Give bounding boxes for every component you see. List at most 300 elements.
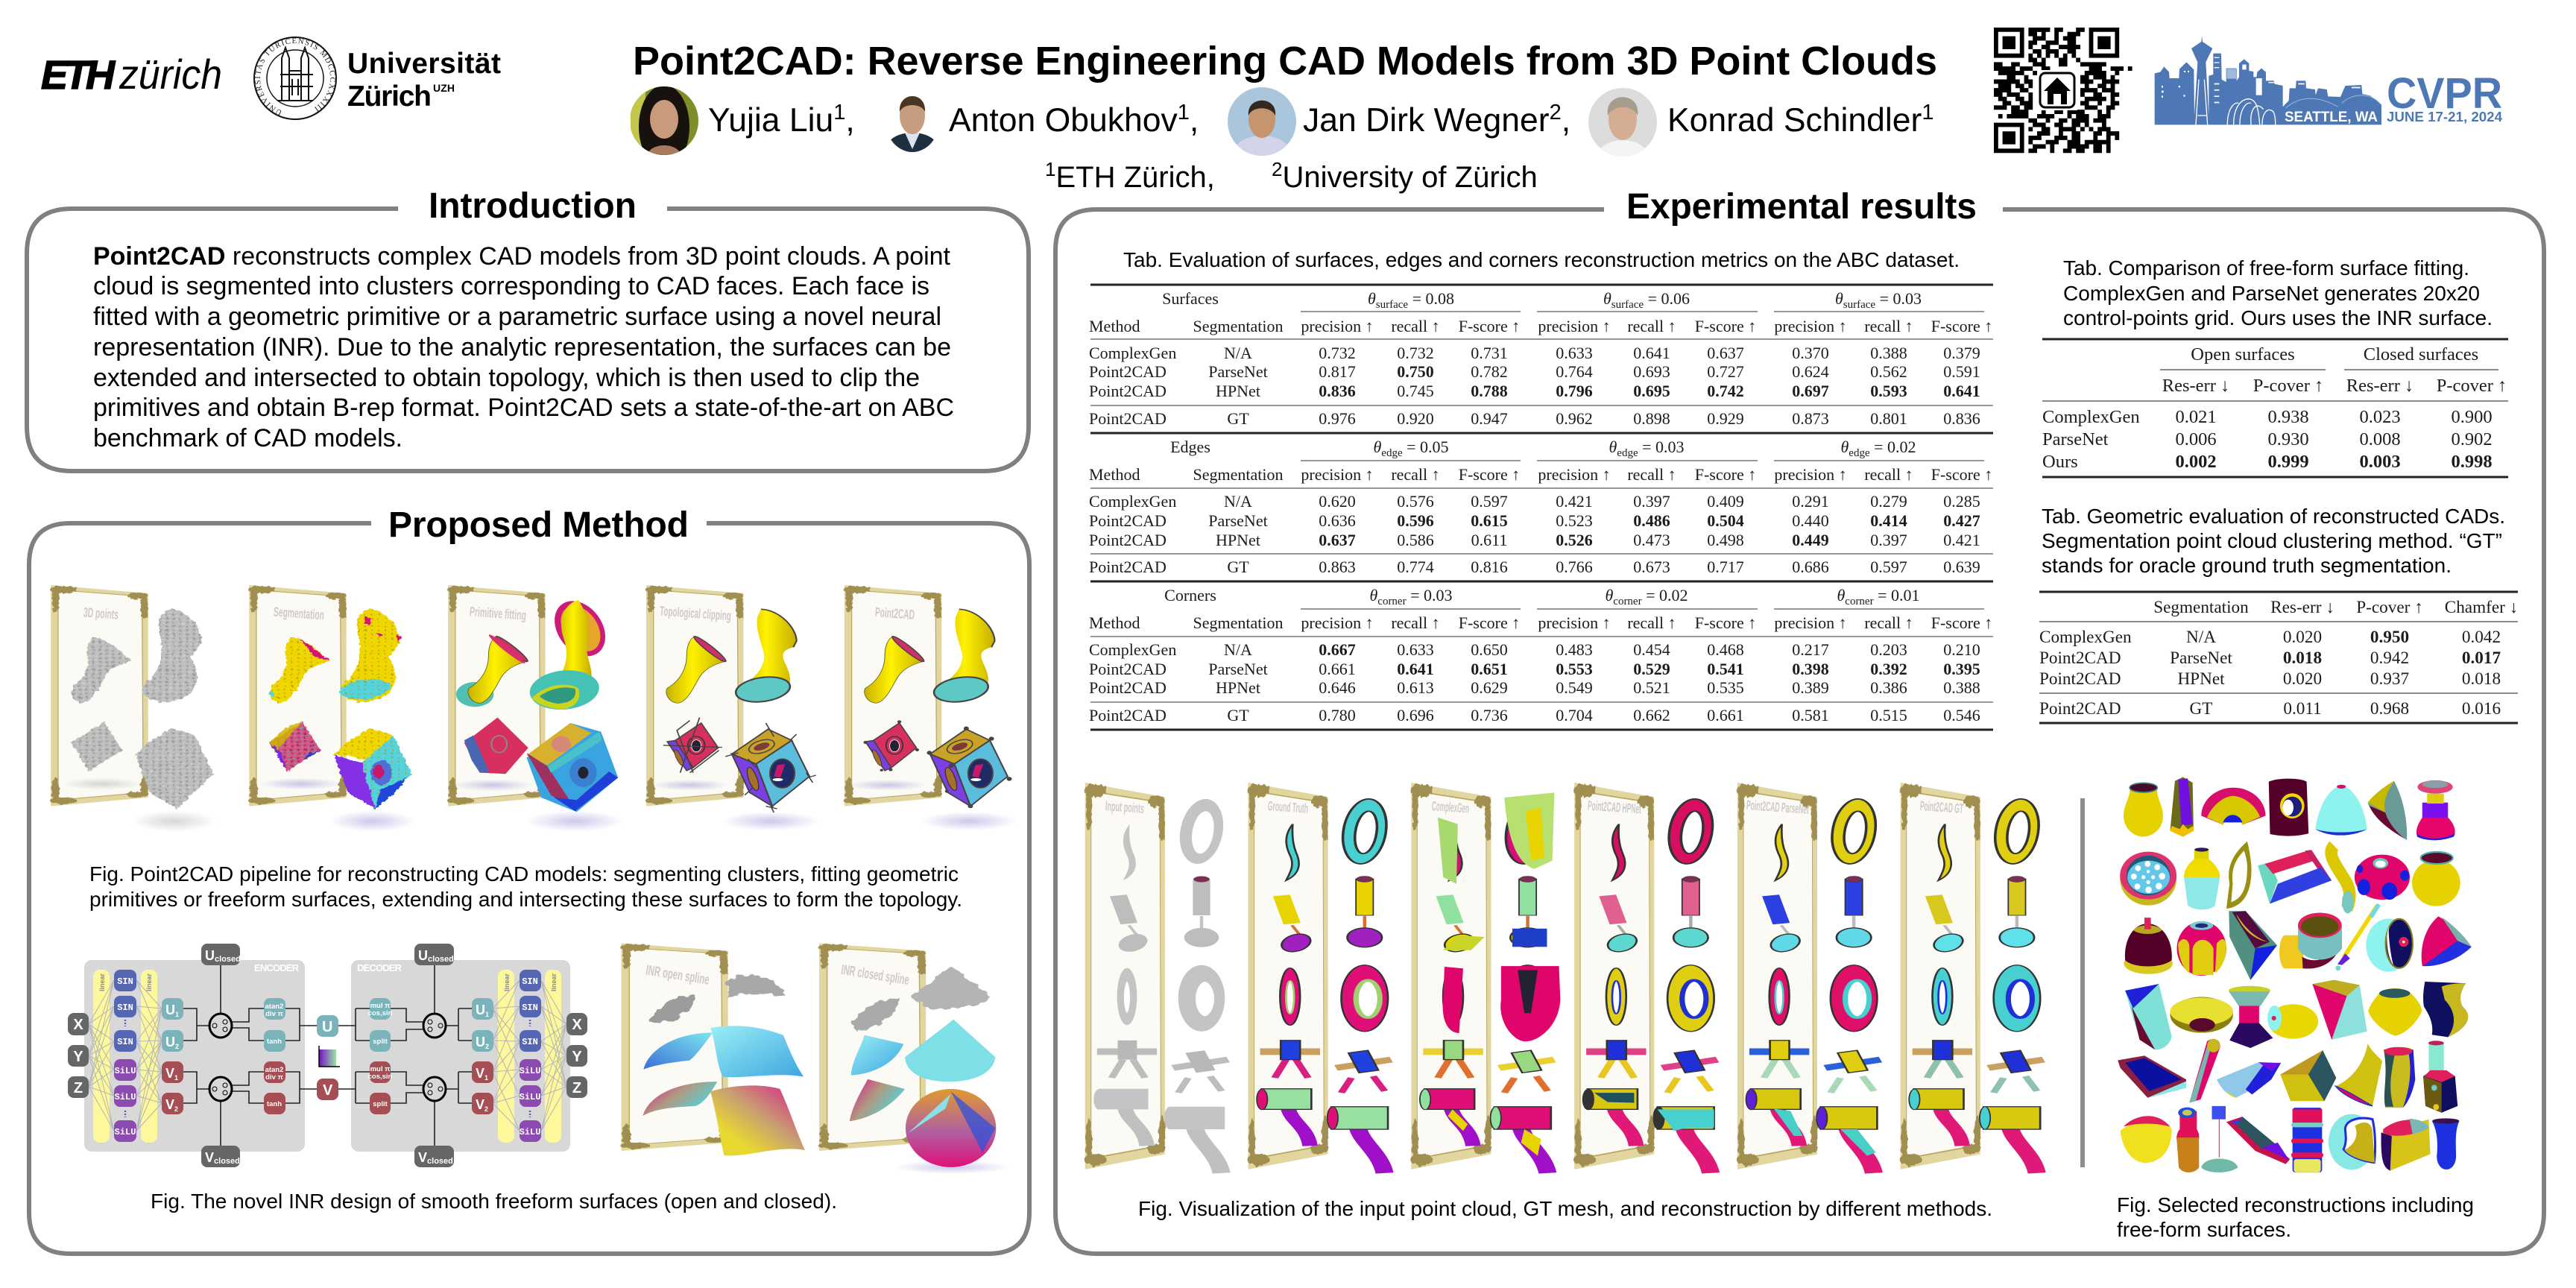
section: surfaces: recall ↑ [1864,317,1913,335]
table: free-form surface fitting: 0.900 [2451,407,2493,427]
section: corners: GT [1227,706,1249,724]
author: Konrad Schindler: Konrad Schindler [1667,102,1922,139]
U and V branch blocks: V [476,1097,484,1112]
section: surfaces: recall ↑ [1627,317,1676,335]
section: surfaces: surface [1843,299,1875,311]
section: corners: 0.483 [1556,640,1593,659]
section: corners: 0.217 [1792,640,1829,659]
section: surfaces: 0.562 [1870,362,1907,381]
U and V branch blocks: 2 [485,1043,489,1050]
section: surfaces: 0.633 [1556,344,1593,362]
logo: University of Zurich seal and wordmark: UZH [433,82,455,94]
section: corners: Point2CAD [1089,678,1167,697]
section: corners: Corners [1164,586,1216,604]
table: geometric evaluation: Point2CAD [2039,699,2121,719]
affiliations: University of Zürich [1282,161,1538,194]
gallery row 5 [2118,1039,2457,1113]
logo: CVPR 2024 Seattle: CVPR [2387,69,2502,118]
icon: portrait Yujia Liu [631,86,698,155]
section: surfaces: Point2CAD [1089,382,1167,400]
section: edges: 0.504 [1707,511,1744,530]
author: Jan Dirk Wegner: , [1562,102,1570,139]
U and V branch blocks: U [476,1003,485,1017]
section: surfaces: 0.898 [1633,409,1670,428]
text block: introduction body [93,242,954,452]
caption: pipeline figure: primitives or freeform surfaces, extending and intersecting these surfaces to form the topology. [89,888,962,911]
section: corners: corner [1845,596,1874,607]
section: edges [1089,438,1992,576]
section: corners: 0.704 [1556,706,1593,724]
section: edges: 0.717 [1707,558,1744,576]
U and V branch blocks: V [418,1150,427,1165]
section: surfaces: 0.727 [1707,362,1744,381]
table: geometric evaluation: 0.017 [2462,648,2501,668]
U and V branch blocks: 2 [175,1043,179,1050]
panel: experimental results [1055,187,2544,1254]
table: geometric evaluation: 0.942 [2370,648,2409,668]
section: edges: 0.766 [1556,558,1593,576]
section: edges: F-score ↑ [1459,465,1520,484]
U and V branch blocks: tanh [267,1038,282,1046]
section: corners: 0.454 [1633,640,1670,659]
section: surfaces: 0.947 [1471,409,1508,428]
SIN and SiLU blocks: SiLU [115,1127,136,1137]
section: edges: 0.597 [1471,492,1508,511]
section: edges: θ [1840,438,1849,456]
section: surfaces: 0.920 [1397,409,1434,428]
section: edges: θ [1609,438,1617,456]
section: edges: Point2CAD [1089,511,1167,530]
section: surfaces: 0.732 [1319,344,1356,362]
section: corners: recall ↑ [1864,613,1913,632]
section: surfaces: 0.742 [1707,382,1744,400]
section: corners: ComplexGen [1089,640,1176,659]
author: Anton Obukhov: , [1190,102,1199,139]
section: surfaces: recall ↑ [1391,317,1440,335]
panel: experimental results: ComplexGen [1431,798,1470,816]
author: Jan Dirk Wegner: 2 [1550,101,1562,124]
section: edges: F-score ↑ [1695,465,1756,484]
section: surfaces: 0.693 [1633,362,1670,381]
section: surfaces: F-score ↑ [1695,317,1756,335]
panel: proposed method [29,505,1029,1254]
section: corners: = 0.02 [1642,586,1688,604]
section: corners: Method [1089,613,1140,632]
section: corners: 0.210 [1943,640,1980,659]
U and V branch blocks: V [205,1150,214,1165]
SIN and SiLU blocks: SIN [117,976,133,987]
section: corners: 0.395 [1943,660,1980,678]
section: edges: F-score ↑ [1931,465,1992,484]
section: corners: 0.529 [1633,660,1670,678]
section: surfaces: 0.817 [1319,362,1356,381]
section: corners: 0.581 [1792,706,1829,724]
section: edges: 0.421 [1943,531,1980,549]
rules [1090,285,1993,730]
U and V branch blocks: U [476,1035,485,1049]
section: corners: 0.696 [1397,706,1434,724]
logo: CVPR 2024 Seattle: JUNE 17-21, 2024 [2387,110,2502,124]
section: surfaces: θ [1835,289,1843,308]
U and V branch blocks: U [165,1035,175,1049]
author: Anton Obukhov: 1 [1178,101,1190,124]
column: Point2CAD GT [1900,783,2044,1173]
section: edges: 0.414 [1870,511,1907,530]
table caption: geometric evaluation [2042,505,2505,577]
input and output XYZ blocks: Y [572,1049,582,1065]
label: INR closed spline: INR closed spline [840,962,910,988]
SIN and SiLU blocks: SiLU [520,1066,540,1076]
section: corners: F-score ↑ [1931,613,1992,632]
section: edges: edge [1381,447,1403,459]
panel: experimental results: Ground Truth [1267,798,1309,816]
mixers [209,1014,446,1101]
table: geometric evaluation: HPNet [2177,669,2225,689]
closed spline group [818,943,1009,1174]
U and V branch blocks: V [323,1082,333,1099]
U and V branch blocks: mul π [370,1002,391,1010]
section: edges: recall ↑ [1864,465,1913,484]
section: surfaces: Segmentation [1193,317,1283,335]
section: edges: 0.576 [1397,492,1434,511]
section: corners: 0.667 [1319,640,1356,659]
panel: decoder [351,960,570,1152]
U and V branch blocks: V [476,1066,484,1081]
section: surfaces: 0.624 [1792,362,1829,381]
table: free-form surface fitting: 0.999 [2267,452,2309,472]
table: free-form surface fitting: 0.008 [2359,429,2401,449]
label: Point2CAD: Point2CAD [874,604,915,622]
U and V branch blocks: V [165,1066,174,1081]
table: free-form surface fitting: 0.930 [2267,429,2309,449]
input and output XYZ blocks: Y [73,1049,83,1065]
section: surfaces: Surfaces [1162,289,1219,308]
section: surfaces: θ [1603,289,1611,308]
author: Anton Obukhov [891,96,1196,152]
table: geometric evaluation: 0.968 [2370,699,2409,719]
logo: CVPR 2024 Seattle: SEATTLE, WA [2285,110,2378,125]
table: geometric evaluation: ComplexGen [2039,628,2132,647]
section: edges: 0.597 [1870,558,1907,576]
section: corners: 0.661 [1707,706,1744,724]
SIN and SiLU blocks: SIN [522,976,538,987]
section: edges: 0.279 [1870,492,1907,511]
section: corners: corner [1613,596,1642,607]
section: edges: ParseNet [1208,511,1268,530]
U and V branch blocks: U [418,948,428,963]
panel: experimental results: Point2CAD GT [1919,798,1964,816]
section: edges: = 0.02 [1870,438,1916,456]
section: corners: 0.553 [1556,660,1593,678]
SIN and SiLU blocks: SIN [117,1003,133,1013]
table: geometric evaluation: Chamfer ↓ [2445,598,2518,617]
table: geometric evaluation: 0.020 [2283,628,2322,647]
section: surfaces: GT [1227,409,1249,428]
logo: CVPR 2024 Seattle [2155,36,2502,125]
section: corners: 0.392 [1870,660,1907,678]
input and output XYZ blocks: Z [74,1080,83,1096]
text block: introduction body: primitives and obtain B-rep format. Point2CAD sets a state-of-the-art on ABC [93,394,954,422]
U and V branch blocks: split [373,1038,388,1046]
author: Konrad Schindler [1588,88,1933,157]
U and V branch blocks: div π [265,1073,284,1082]
section: corners: 0.388 [1943,678,1980,697]
table: geometric evaluation: 0.011 [2283,699,2322,719]
table caption: free-form surface fitting [2063,256,2493,329]
caption: pipeline figure [89,862,962,911]
author: Yujia Liu [631,86,852,155]
author: Konrad Schindler: 1 [1922,101,1934,124]
logo: ETH Zurich [41,51,222,98]
table: free-form surface fitting: Open surfaces [2191,344,2295,364]
section: corners: 0.541 [1707,660,1744,678]
section: edges: 0.586 [1397,531,1434,549]
section: surfaces: 0.788 [1471,382,1508,400]
section: corners: 0.613 [1397,678,1434,697]
heading: Experimental results: Experimental results [1626,187,1977,227]
U and V branch blocks: closed [215,955,241,964]
section: surfaces: 0.695 [1633,382,1670,400]
caption: comparison figure: Fig. Visualization of the input point cloud, GT mesh, and reconstruction by different methods. [1138,1197,1992,1220]
affiliations: ETH Zürich, [1055,161,1215,194]
affiliations: 1 [1045,158,1055,180]
section: edges: 0.611 [1471,531,1507,549]
table: free-form surface fitting: Ours [2042,452,2078,472]
section: surfaces: 0.745 [1397,382,1434,400]
caption: gallery figure [2117,1193,2474,1241]
section: surfaces: 0.637 [1707,344,1744,362]
section: surfaces: HPNet [1216,382,1260,400]
section: corners: precision ↑ [1538,613,1611,632]
SIN and SiLU blocks: linear [550,973,558,991]
SIN and SiLU blocks: SiLU [115,1092,136,1102]
section: edges: recall ↑ [1627,465,1676,484]
section: edges: 0.636 [1319,511,1356,530]
logo: University of Zurich seal and wordmark: Zürich [347,80,432,113]
section: corners: recall ↑ [1627,613,1676,632]
table caption: geometric evaluation: stands for oracle ground truth segmentation. [2042,554,2452,577]
section: corners: Point2CAD [1089,660,1167,678]
section: edges: Point2CAD [1089,558,1167,576]
figure: input, GT and reconstruction comparison [1085,783,2044,1173]
gallery row 2 [2120,842,2460,913]
chart: INR encoder decoder network diagram [68,944,587,1167]
input and output XYZ blocks [68,1013,587,1098]
table: free-form surface fitting: 0.023 [2359,407,2401,427]
table: geometric evaluation: 0.020 [2283,669,2322,689]
U and V branch blocks: 1 [174,1074,178,1082]
section: edges: N/A [1224,492,1252,511]
section: surfaces: precision ↑ [1301,317,1374,335]
section: surfaces: F-score ↑ [1459,317,1520,335]
section: edges: 0.421 [1556,492,1593,511]
section: corners: 0.549 [1556,678,1593,697]
section: surfaces: 0.641 [1943,382,1980,400]
logo: University of Zurich seal and wordmark: UNIVERSITAS TURICENSIS MDCCCXXXIII [255,38,335,116]
section: surfaces: 0.370 [1792,344,1829,362]
table: geometric evaluation: GT [2190,699,2212,719]
column: Point2CAD HPNet [1573,783,1717,1173]
logo: University of Zurich seal and wordmark [253,37,501,120]
section: corners: θ [1837,586,1845,604]
SIN and SiLU blocks: linear [145,973,153,991]
SIN and SiLU blocks: SiLU [115,1066,136,1076]
U and V branch blocks [162,944,493,1167]
section: edges: 0.498 [1707,531,1744,549]
section: corners: 0.629 [1471,678,1508,697]
section: edges: 0.596 [1397,511,1434,530]
section: surfaces: surface [1611,299,1644,311]
section: edges: 0.774 [1397,558,1434,576]
column: ComplexGen [1410,783,1560,1173]
logo: ETH Zurich: ETH [41,53,116,98]
U and V branch blocks: V [165,1097,174,1112]
text block: introduction body: extended and intersected to obtain topology, which is then used to clip the [93,364,920,392]
U and V branch blocks: tanh [267,1100,282,1108]
table: geometric evaluation: Segmentation [2153,598,2249,617]
logo: ETH Zurich: zürich [119,51,222,98]
icon: portrait Konrad Schindler [1588,88,1657,157]
section: surfaces: Point2CAD [1089,409,1167,428]
U and V branch blocks: cos,sin [368,1009,393,1017]
table: geometric evaluation: 0.937 [2370,669,2409,689]
U and V branch blocks: atan2 [265,1003,283,1011]
encoder and decoder labels [254,962,402,973]
section: edges: 0.397 [1633,492,1670,511]
section: surfaces: = 0.06 [1644,289,1690,308]
section: surfaces: 0.764 [1556,362,1593,381]
U and V branch blocks: closed [214,1157,240,1166]
section: edges: Edges [1170,438,1210,456]
section: surfaces: 0.796 [1556,382,1593,400]
panel: introduction [27,186,1029,471]
section: edges: 0.615 [1471,511,1508,530]
table: free-form surface fitting: 0.902 [2451,429,2493,449]
section: corners: 0.633 [1397,640,1434,659]
section: edges: 0.440 [1792,511,1829,530]
wiring [183,965,472,1146]
section: corners: 0.521 [1633,678,1670,697]
U and V branch blocks: div π [265,1010,284,1018]
section: edges: 0.673 [1633,558,1670,576]
label: Topological clipping: Topological clipping [659,604,732,623]
affiliations: 2 [1272,158,1282,180]
section: corners: 0.389 [1792,678,1829,697]
section: edges: 0.285 [1943,492,1980,511]
gallery row 6 [2121,1106,2459,1172]
section: surfaces: 0.731 [1471,344,1508,362]
table: geometric evaluation: Res-err ↓ [2270,598,2334,617]
table: free-form surface fitting: 0.938 [2267,407,2309,427]
label: Segmentation: Segmentation [273,604,325,622]
author: Jan Dirk Wegner [1228,87,1568,156]
section: edges: Segmentation [1193,465,1283,484]
section: surfaces: 0.976 [1319,409,1356,428]
section: edges: 0.291 [1792,492,1829,511]
section: edges: Point2CAD [1089,531,1167,549]
table: free-form surface fitting: P-cover ↑ [2437,376,2507,396]
author: Yujia Liu: 1 [833,101,845,124]
table: free-form surface fitting: Closed surfaces [2364,344,2478,364]
section: edges: HPNet [1216,531,1260,549]
section: corners: 0.646 [1319,678,1356,697]
section: edges: Method [1089,465,1140,484]
icon: UV colour square [319,1046,340,1067]
linear layers [93,970,561,1143]
U and V branch blocks: closed [428,955,454,964]
section: corners: θ [1369,586,1377,604]
section: edges: = 0.03 [1638,438,1685,456]
text block: introduction body: cloud is segmented into clusters corresponding to CAD faces. Each face is [93,272,929,300]
section: edges: precision ↑ [1301,465,1374,484]
figure: pipeline stages primitive fitting, clipping, result [447,585,1017,832]
author: Yujia Liu: Yujia Liu [708,102,833,139]
section: corners: 0.535 [1707,678,1744,697]
section: surfaces: 0.782 [1471,362,1508,381]
section: corners: 0.651 [1471,660,1508,678]
SIN and SiLU blocks [98,970,558,1142]
section: surfaces: 0.929 [1707,409,1744,428]
section: edges: edge [1617,447,1638,459]
SIN and SiLU blocks: linear [503,973,511,991]
table caption: free-form surface fitting: ComplexGen and ParseNet generates 20x20 [2063,282,2480,305]
table: geometric evaluation [2039,592,2518,723]
U and V branch blocks: 1 [485,1011,489,1018]
section: corners: precision ↑ [1774,613,1847,632]
section: corners: 0.386 [1870,678,1907,697]
section: corners: precision ↑ [1301,613,1374,632]
section: edges: 0.863 [1319,558,1356,576]
label: Input points: Input points [1105,798,1145,816]
table: surfaces, edges and corners metrics [1089,285,1993,730]
U and V branch blocks: cos,sin [368,1073,393,1081]
table caption: free-form surface fitting: Tab. Comparison of free-form surface fitting. [2063,256,2469,280]
figure: pipeline stages 3D points and segmentation [50,585,415,832]
U and V branch blocks: 1 [484,1074,488,1082]
input and output XYZ blocks: Z [572,1080,581,1096]
encoder and decoder labels: ENCODER [254,962,300,973]
table: free-form surface fitting: 0.003 [2359,452,2401,472]
section: edges: 0.637 [1319,531,1356,549]
logo: University of Zurich seal and wordmark: Universität [347,48,501,80]
section: corners: 0.661 [1319,660,1356,678]
U and V branch blocks: mul π [370,1065,391,1073]
section: corners: = 0.03 [1407,586,1453,604]
text block: introduction body: fitted with a geometric primitive or a parametric surface using a novel neural [93,303,941,331]
U and V branch blocks: closed [427,1157,453,1166]
text block: introduction body: Point2CAD reconstructs complex CAD models from 3D point clouds. A point [93,242,951,271]
section: corners: 0.641 [1397,660,1434,678]
table: free-form surface fitting: ComplexGen [2042,407,2140,427]
section: corners: ParseNet [1208,660,1268,678]
table: free-form surface fitting: 0.021 [2175,407,2217,427]
section: edges: edge [1849,447,1870,459]
section: surfaces: surface [1376,299,1408,311]
section: edges: 0.620 [1319,492,1356,511]
SIN and SiLU blocks: SIN [522,1037,538,1047]
column: ground truth [1248,783,1391,1173]
section: edges: 0.816 [1471,558,1508,576]
label: 3D points: 3D points [83,604,119,622]
section: corners: θ [1605,586,1613,604]
U and V branch blocks: 1 [175,1011,179,1018]
section: edges: 0.639 [1943,558,1980,576]
table: geometric evaluation: N/A [2186,628,2216,647]
table caption: geometric evaluation: Tab. Geometric evaluation of reconstructed CADs. [2042,505,2505,528]
table: free-form surface fitting: Res-err ↓ [2346,376,2414,396]
section: surfaces: 0.873 [1792,409,1829,428]
section: surfaces: 0.379 [1943,344,1980,362]
